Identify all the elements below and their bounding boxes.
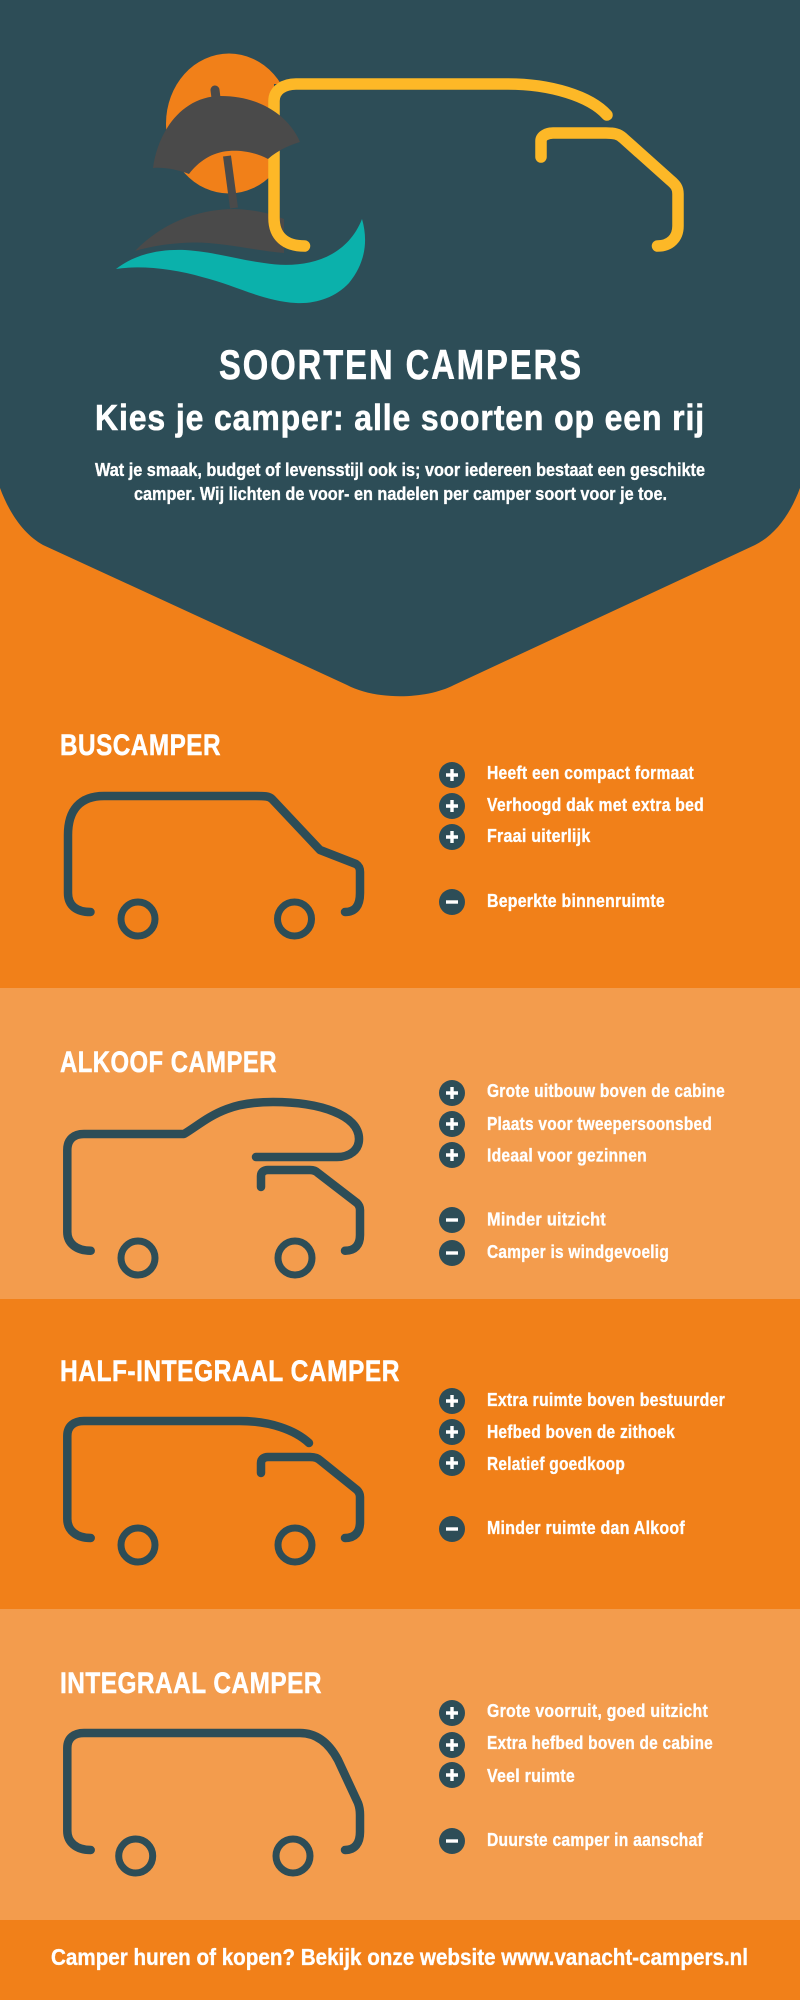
heading: INTEGRAAL CAMPER <box>60 1667 322 1700</box>
icon: buscamper van <box>68 796 360 936</box>
icon: pole <box>227 156 234 208</box>
heading: BUSCAMPER <box>60 729 221 762</box>
pro: compact <box>439 762 694 788</box>
icon: umbrella <box>153 90 300 174</box>
con: binnenruimte: Beperkte binnenruimte <box>487 890 665 911</box>
pro: uitbouw: Grote uitbouw boven de cabine <box>487 1080 725 1101</box>
con: duurste <box>439 1828 703 1854</box>
panel: integraal camper <box>0 1609 800 1920</box>
con: uitzicht <box>439 1207 606 1233</box>
icon: sun <box>166 54 292 194</box>
con: minder ruimte: Minder ruimte dan Alkoof <box>487 1517 685 1538</box>
con: binnenruimte <box>439 889 665 915</box>
header panel <box>0 0 800 696</box>
panel: alkoof camper <box>0 988 800 1299</box>
icon: wave <box>116 219 365 303</box>
icon: half-integraal van <box>67 1421 360 1562</box>
con: duurste: Duurste camper in aanschaf <box>487 1829 703 1850</box>
pro: hefbed: Hefbed boven de zithoek <box>487 1421 675 1442</box>
pro: tweepersoonsbed: Plaats voor tweepersoonsbed <box>487 1113 712 1134</box>
pro: uiterlijk: Fraai uiterlijk <box>487 825 591 846</box>
pro: hefbed cabine <box>439 1732 713 1758</box>
pro: voorruit: Grote voorruit, goed uitzicht <box>487 1700 708 1721</box>
heading: ALKOOF CAMPER <box>60 1046 277 1079</box>
pro: tweepersoonsbed <box>439 1111 712 1137</box>
pro: goedkoop: Relatief goedkoop <box>487 1453 625 1474</box>
intro text <box>95 459 705 504</box>
panel: half-integraal camper <box>60 1355 725 1562</box>
pro: uitbouw <box>439 1080 725 1106</box>
pro: goedkoop <box>439 1450 625 1476</box>
pro: ruimte boven bestuurder <box>439 1388 725 1414</box>
icon: yellow camper cabin <box>541 133 678 246</box>
panel: buscamper <box>60 729 704 936</box>
pro: verhoogd dak: Verhoogd dak met extra bed <box>487 794 704 815</box>
title: SOORTEN CAMPERS <box>219 341 583 388</box>
pro: veel ruimte: Veel ruimte <box>487 1765 575 1786</box>
heading: HALF-INTEGRAAL CAMPER <box>60 1355 400 1388</box>
intro text: camper. Wij lichten de voor- en nadelen per camper soort voor je toe. <box>134 483 667 504</box>
icon: island <box>135 209 284 253</box>
icon: integraal van <box>67 1733 360 1873</box>
con: windgevoelig: Camper is windgevoelig <box>487 1241 669 1262</box>
pro: voorruit <box>439 1700 708 1726</box>
intro text: Wat je smaak, budget of levensstijl ook is; voor iedereen bestaat een geschikte <box>95 459 705 480</box>
pro: compact: Heeft een compact formaat <box>487 762 694 783</box>
illustration: beach and camper <box>116 54 678 303</box>
icon: yellow camper body <box>274 84 607 246</box>
pro: ruimte boven bestuurder: Extra ruimte boven bestuurder <box>487 1389 725 1410</box>
subtitle: Kies je camper: alle soorten op een rij <box>95 397 705 438</box>
pro: gezinnen <box>439 1142 647 1168</box>
pro: hefbed cabine: Extra hefbed boven de cabine <box>487 1732 713 1753</box>
pro: hefbed <box>439 1419 675 1445</box>
pro: uiterlijk <box>439 824 591 850</box>
pro: verhoogd dak <box>439 793 704 819</box>
con: windgevoelig <box>439 1240 669 1266</box>
pro: gezinnen: Ideaal voor gezinnen <box>487 1144 647 1166</box>
icon: alkoof van <box>67 1102 360 1275</box>
con: minder ruimte <box>439 1516 685 1542</box>
con: uitzicht: Minder uitzicht <box>487 1208 606 1230</box>
pro: veel ruimte <box>439 1762 575 1788</box>
